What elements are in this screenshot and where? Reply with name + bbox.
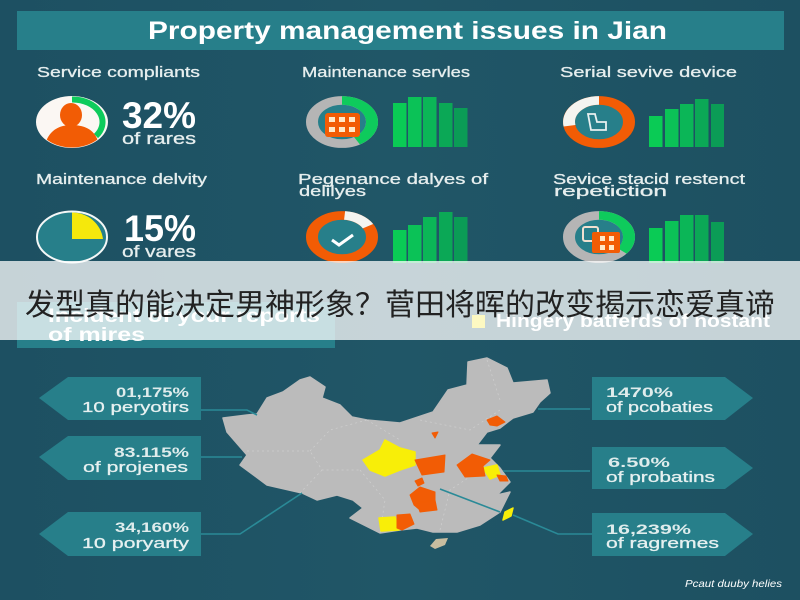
callout left 3: [39, 512, 201, 556]
panel: sevice stacid restenct: [553, 172, 745, 263]
heading second line: repetiction: [554, 184, 667, 200]
highlighted provinces orange: [397, 416, 508, 530]
title banner: [17, 11, 784, 50]
island: Hainan: [430, 538, 448, 549]
overlay caption band: 发型真的能决定男神形象？菅田将晖的改变揭示恋爱真谛: [25, 289, 775, 322]
map of China: [223, 358, 550, 549]
callout left 1: [39, 377, 201, 420]
callout left 2: [39, 436, 201, 480]
icon: pie chart: [37, 212, 107, 262]
bar chart: [649, 215, 724, 263]
section banner: of mires: [48, 325, 145, 346]
callout right 3: 16,239%: [606, 521, 692, 537]
stat caption: of rares: [122, 129, 196, 148]
panel: pegenance dalyes: [298, 172, 489, 263]
panel: maintenance delvity: [36, 172, 208, 262]
icon: person donut: [36, 96, 108, 148]
heading: Service compliants: [37, 65, 200, 81]
callout right 1: of pcobaties: [606, 399, 713, 416]
heading: Serial sevive device: [560, 65, 737, 81]
footer note: Pcaut duuby helies: [685, 578, 783, 590]
icon: tiles donut: [569, 215, 629, 259]
callout right 3: of ragremes: [606, 535, 719, 552]
callout right 2: 6.50%: [608, 454, 671, 470]
stat: 15%: [124, 208, 196, 249]
callout left 2: 83.115%: [114, 444, 190, 460]
overlay caption band: [0, 261, 800, 340]
callout left 1: 01,175%: [116, 384, 190, 400]
heading: Maintenance delvity: [36, 172, 208, 188]
callout left 3: 10 poryarty: [82, 535, 190, 552]
panel: serial sevive device: [560, 65, 737, 147]
section banner: [17, 302, 335, 348]
stat: 32%: [122, 95, 196, 136]
bar chart: [393, 97, 468, 147]
panel: service compliants: [36, 65, 200, 155]
heading second line: delilyes: [299, 184, 366, 200]
heading: Sevice stacid restenct: [553, 172, 745, 188]
callout left 2: of projenes: [83, 459, 188, 476]
legend: Hingery batferds of nostant: [496, 311, 770, 331]
section banner: Incident of your reports: [48, 306, 320, 327]
heading: Pegenance dalyes of: [298, 172, 489, 188]
connector lines: [201, 409, 592, 534]
callout left 3: 34,160%: [115, 519, 190, 535]
callout right 1: [592, 377, 753, 420]
stat caption: of vares: [122, 242, 196, 261]
province borders: [247, 360, 500, 533]
callout right 2: [592, 447, 753, 489]
callout left 1: 10 peryotirs: [82, 399, 189, 416]
icon: device donut: [569, 100, 629, 144]
title banner: Property management issues in Jian: [148, 17, 667, 45]
bar chart: [649, 99, 724, 147]
bar chart: [393, 212, 468, 263]
highlighted provinces yellow: [363, 440, 513, 531]
icon: grid donut: [312, 100, 372, 144]
icon: check donut: [312, 215, 372, 259]
callout right 1: 1470%: [606, 384, 674, 400]
callout right 2: of probatins: [606, 469, 715, 486]
callout right 3: [592, 513, 753, 556]
heading: Maintenance servles: [302, 65, 470, 81]
panel: maintenance servles: [302, 65, 470, 147]
